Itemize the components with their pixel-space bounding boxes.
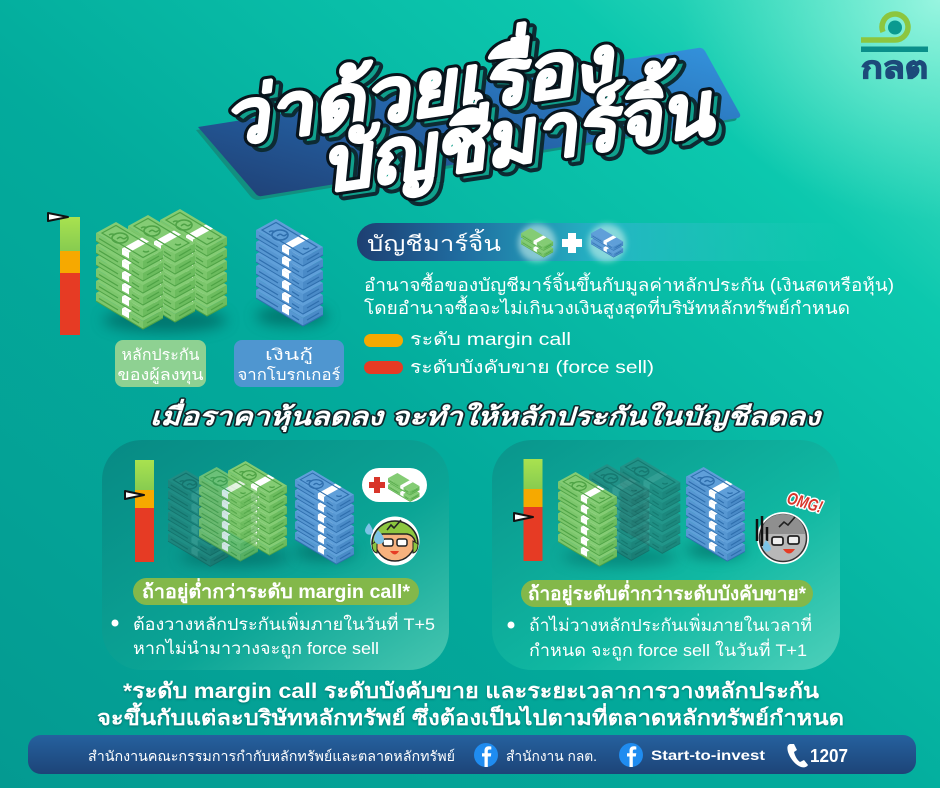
bullet text	[112, 612, 435, 659]
cash stacks: collateral falling	[168, 461, 290, 566]
legend	[364, 329, 654, 377]
title: บัญชีมาร์จิ้น	[320, 58, 727, 216]
footer bar	[28, 735, 916, 774]
cash stack: loan	[686, 467, 746, 561]
loan cash stack	[256, 219, 328, 326]
description	[364, 272, 894, 319]
cash stack: loan	[295, 470, 355, 564]
margin account header: บัญชีมาร์จิ้น	[367, 229, 501, 256]
margin account header	[357, 223, 847, 262]
icon: add collateral	[362, 468, 427, 502]
panel: below margin call	[102, 440, 449, 670]
label: collateral: หลักประกัน	[122, 347, 200, 364]
bullet text: กำหนด จะถูก force sell ในวันที่ T+1	[529, 638, 807, 661]
condition pill: ถ้าอยู่ต่ำกว่าระดับ margin call*	[142, 578, 411, 604]
logo: SEC	[861, 14, 928, 85]
legend: ระดับบังคับขาย (force sell)	[410, 357, 654, 377]
title: บัญชีมาร์จิ้น	[313, 53, 720, 211]
footnote: จะขึ้นกับแต่ละบริษัทหลักทรัพย์ ซึ่งต้องเป็นไปตามที่ตลาดหลักทรัพย์กำหนด	[97, 702, 844, 730]
cash stacks: collateral falling further	[558, 457, 680, 566]
description: โดยอำนาจซื้อจะไม่เกินวงเงินสูงสุดที่บริษัทหลักทรัพย์กำหนด	[364, 295, 850, 319]
gauge	[125, 460, 154, 562]
label: broker loan	[234, 340, 344, 387]
label: collateral	[115, 340, 206, 387]
bullet text: ต้องวางหลักประกันเพิ่มภายในวันที่ T+5	[133, 612, 435, 634]
description: อำนาจซื้อของบัญชีมาร์จิ้นขึ้นกับมูลค่าหลักประกัน (เงินสดหรือหุ้น)	[364, 272, 894, 296]
bullet text	[508, 613, 812, 661]
logo: SEC: กลต	[861, 52, 928, 85]
icon: facebook	[619, 743, 643, 767]
bullet text: หากไม่นำมาวางจะถูก force sell	[133, 638, 379, 659]
facebook page name: สำนักงาน กลต.	[506, 748, 597, 764]
title: ว่าด้วยเรื่อง	[214, 9, 622, 162]
bullet text: ถ้าไม่วางหลักประกันเพิ่มภายในเวลาที่	[529, 613, 812, 635]
icon: phone	[787, 744, 808, 767]
icon: OMG: OMG!	[785, 489, 825, 517]
main gauge	[48, 213, 80, 335]
hotline: 1207	[810, 746, 848, 766]
icon: facebook	[474, 743, 498, 767]
collateral cash stack	[96, 209, 227, 332]
title	[214, 8, 727, 217]
icon: shocked investor	[757, 512, 809, 564]
label: broker loan: เงินกู้	[265, 347, 313, 365]
gauge	[514, 459, 542, 561]
icon: worried investor	[365, 516, 420, 566]
label: collateral: ของผู้ลงทุน	[118, 367, 204, 385]
title: บัญชีมาร์จิ้น	[313, 53, 720, 211]
panel: below force sell	[492, 440, 840, 670]
condition pill: ถ้าอยู่ระดับต่ำกว่าระดับบังคับขาย*	[528, 580, 807, 606]
title: ว่าด้วยเรื่อง	[221, 14, 629, 167]
footnote: *ระดับ margin call ระดับบังคับขาย และระยะเวลาการวางหลักประกัน	[123, 680, 820, 703]
title: ว่าด้วยเรื่อง	[214, 9, 622, 162]
label: broker loan: จากโบรกเกอร์	[238, 366, 340, 384]
investor page name: Start-to-invest	[651, 747, 765, 763]
title banner	[196, 48, 740, 200]
organisation name: สำนักงานคณะกรรมการกำกับหลักทรัพย์และตลาดหลักทรัพย์	[88, 748, 455, 764]
section heading: เมื่อราคาหุ้นลดลง จะทำให้หลักประกันในบัญชีลดลง	[150, 398, 822, 432]
legend: ระดับ margin call	[410, 329, 571, 349]
footnote	[97, 680, 844, 730]
